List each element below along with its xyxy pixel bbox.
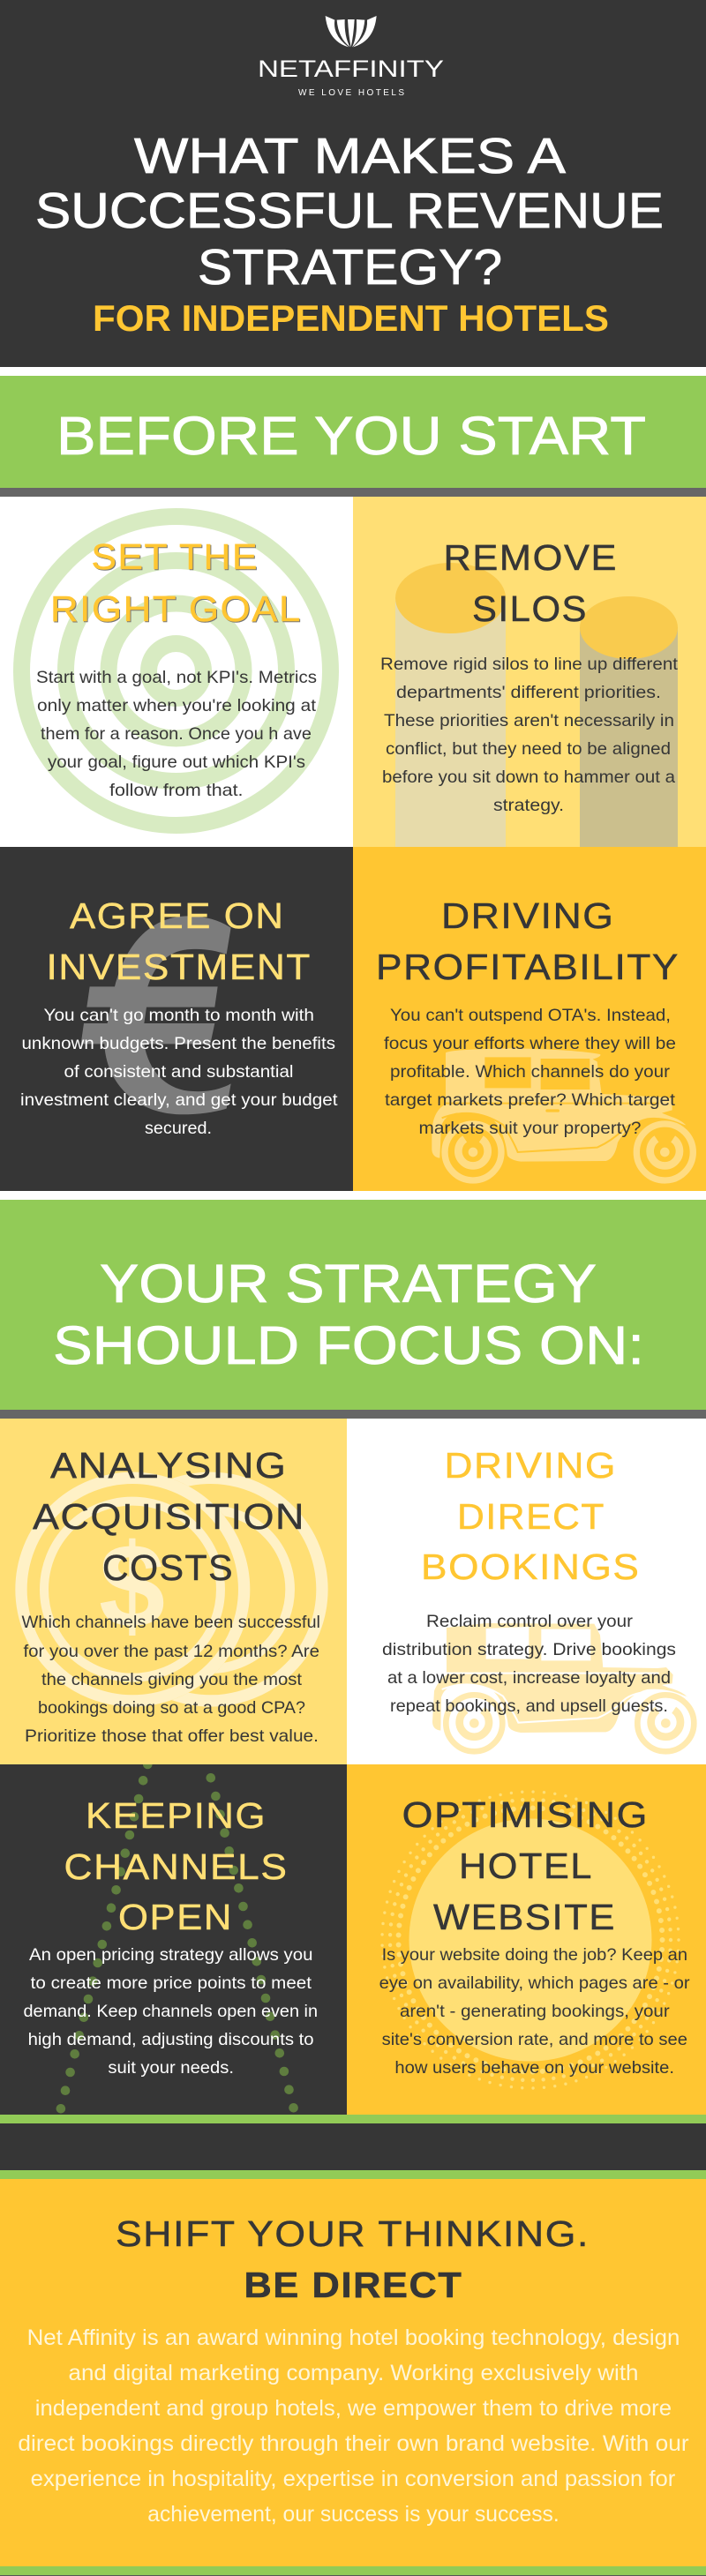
heading — [50, 536, 302, 629]
body text: conflict, but they need to be aligned — [386, 739, 671, 759]
heading — [33, 1445, 305, 1588]
body text: before you sit down to hammer out a — [382, 768, 675, 787]
heading: RIGHT GOAL — [50, 588, 302, 629]
body text — [380, 655, 679, 815]
heading: DRIVING — [445, 1445, 617, 1486]
body text: achievement, our success is your success. — [147, 2502, 560, 2527]
panel: driving profitability — [353, 847, 706, 1191]
body text: departments' different priorities. — [396, 683, 661, 702]
body text: at a lower cost, increase loyalty and — [387, 1668, 671, 1688]
panel: analysing acquisition costs — [0, 1419, 347, 1764]
heading: COSTS — [102, 1547, 234, 1588]
heading: KEEPING — [86, 1795, 267, 1836]
heading: WEBSITE — [433, 1897, 616, 1937]
icon: dollar sign: $ — [99, 1519, 165, 1652]
icon: silo left — [395, 563, 506, 847]
heading — [443, 537, 618, 629]
body text: suit your needs. — [108, 2058, 234, 2078]
body text: site's conversion rate, and more to see — [382, 2030, 687, 2049]
body text — [379, 1945, 690, 2078]
body text: These priorities aren't necessarily in — [384, 711, 674, 730]
icon: euro sign — [81, 916, 231, 1114]
body text: experience in hospitality, expertise in conversion and passion for — [31, 2467, 675, 2491]
panel: set the right goal — [0, 497, 353, 847]
heading: REMOVE — [443, 537, 618, 578]
body text: Prioritize those that offer best value. — [25, 1726, 319, 1746]
icon: sun — [382, 1792, 679, 2088]
body text: of consistent and substantial — [64, 1062, 293, 1082]
panel: driving direct bookings — [347, 1419, 706, 1764]
icon: silo right — [580, 596, 678, 847]
body text: to create more price points to meet — [31, 1973, 312, 1993]
section banner: before you start — [0, 376, 706, 497]
heading: ACQUISITION — [33, 1496, 305, 1537]
heading: INVESTMENT — [46, 947, 312, 987]
heading: SET THE — [92, 536, 259, 577]
panel: remove silos — [353, 497, 706, 847]
body text: Remove rigid silos to line up different — [380, 655, 679, 674]
heading: CHANNELS — [64, 1846, 288, 1887]
heading: DRIVING — [441, 895, 614, 936]
body text: and digital marketing company. Working exclusively with — [69, 2361, 639, 2385]
body text: You can't go month to month with — [44, 1006, 314, 1025]
body text — [18, 2325, 689, 2527]
heading: BOOKINGS — [421, 1546, 641, 1587]
footer band — [0, 2566, 706, 2576]
section banner: your strategy should focus on: YOUR STRATEGY — [100, 1254, 597, 1314]
body text — [384, 1006, 676, 1138]
icon: vintage car — [432, 1048, 693, 1180]
body text: Which channels have been successful — [21, 1613, 320, 1632]
section banner: your strategy should focus on — [0, 1200, 706, 1419]
heading: ANALYSING — [50, 1445, 288, 1486]
title: WHAT MAKES A — [134, 128, 566, 184]
heading: OPEN — [118, 1897, 233, 1937]
body text: Is your website doing the job? Keep an — [382, 1945, 687, 1965]
section banner: your strategy should focus on: SHOULD FOCUS ON: — [53, 1315, 644, 1375]
divider band — [0, 2115, 706, 2179]
body text: aren't - generating bookings, your — [400, 2002, 670, 2021]
icon: NetAffinity logo — [326, 16, 377, 47]
body text — [20, 1006, 338, 1138]
body text: eye on availability, which pages are - or — [379, 1973, 690, 1993]
body text: independent and group hotels, we empower them to drive more — [35, 2396, 672, 2421]
tagline: WE LOVE HOTELS — [298, 88, 404, 98]
icon: vintage car — [432, 1623, 694, 1751]
title: STRATEGY? — [198, 239, 502, 296]
heading — [376, 895, 680, 987]
body text: for you over the past 12 months? Are — [23, 1642, 319, 1661]
icon: dotted road — [56, 1764, 298, 2114]
subheading: BE DIRECT — [244, 2265, 462, 2305]
icon: target rings — [21, 517, 330, 826]
panel: shift your thinking — [0, 2179, 706, 2566]
body text: bookings doing so at a good CPA? — [38, 1698, 305, 1718]
body text: only matter when you're looking at — [37, 696, 317, 715]
body text — [36, 668, 317, 800]
subtitle: FOR INDEPENDENT HOTELS — [93, 297, 609, 339]
body text: them for a reason. Once you h ave — [41, 724, 312, 744]
heading — [64, 1795, 288, 1937]
heading — [402, 1794, 649, 1937]
title — [35, 128, 664, 296]
body text: markets suit your property? — [418, 1119, 642, 1138]
body text: profitable. Which channels do your — [390, 1062, 671, 1082]
body text: Start with a goal, not KPI's. Metrics — [36, 668, 317, 687]
section banner: before you start: BEFORE YOU START — [56, 406, 646, 466]
brand name: NETAFFINITY — [258, 56, 444, 82]
body text — [23, 1945, 318, 2078]
header panel — [0, 0, 706, 367]
body text: high demand, adjusting discounts to — [28, 2030, 314, 2049]
body text: focus your efforts where they will be — [384, 1034, 676, 1053]
panel: agree on investment — [0, 847, 353, 1191]
heading: HOTEL — [459, 1846, 593, 1886]
heading — [46, 895, 312, 987]
body text: strategy. — [493, 796, 564, 815]
body text: You can't outspend OTA's. Instead, — [390, 1006, 671, 1025]
body text: Net Affinity is an award winning hotel booking technology, design — [27, 2325, 680, 2350]
heading: SILOS — [472, 588, 588, 629]
body text: direct bookings directly through their own brand website. With our — [18, 2431, 689, 2456]
body text: investment clearly, and get your budget — [20, 1090, 338, 1110]
body text: Reclaim control over your — [426, 1612, 634, 1631]
heading: AGREE ON — [70, 895, 284, 936]
body text: distribution strategy. Drive bookings — [382, 1640, 676, 1659]
heading — [421, 1445, 641, 1587]
body text: how users behave on your website. — [394, 2058, 674, 2078]
body text: demand. Keep channels open even in — [23, 2002, 318, 2021]
body text: target markets prefer? Which target — [385, 1090, 676, 1110]
heading: DIRECT — [457, 1496, 605, 1537]
panel: optimising hotel website — [347, 1764, 706, 2115]
body text: unknown budgets. Present the benefits — [21, 1034, 335, 1053]
body text — [21, 1613, 320, 1746]
heading: OPTIMISING — [402, 1794, 649, 1835]
body text: the channels giving you the most — [41, 1670, 303, 1689]
heading: SHIFT YOUR THINKING. — [116, 2213, 590, 2254]
heading: PROFITABILITY — [376, 947, 680, 987]
body text: An open pricing strategy allows you — [29, 1945, 312, 1965]
body text: secured. — [145, 1119, 212, 1138]
panel: keeping channels open — [0, 1764, 347, 2115]
body text: follow from that. — [109, 781, 244, 800]
title: SUCCESSFUL REVENUE — [35, 183, 664, 239]
body text — [382, 1612, 676, 1716]
body text: your goal, figure out which KPI's — [48, 753, 305, 772]
icon: coins — [15, 1472, 322, 1707]
body text: repeat bookings, and upsell guests. — [390, 1696, 668, 1716]
